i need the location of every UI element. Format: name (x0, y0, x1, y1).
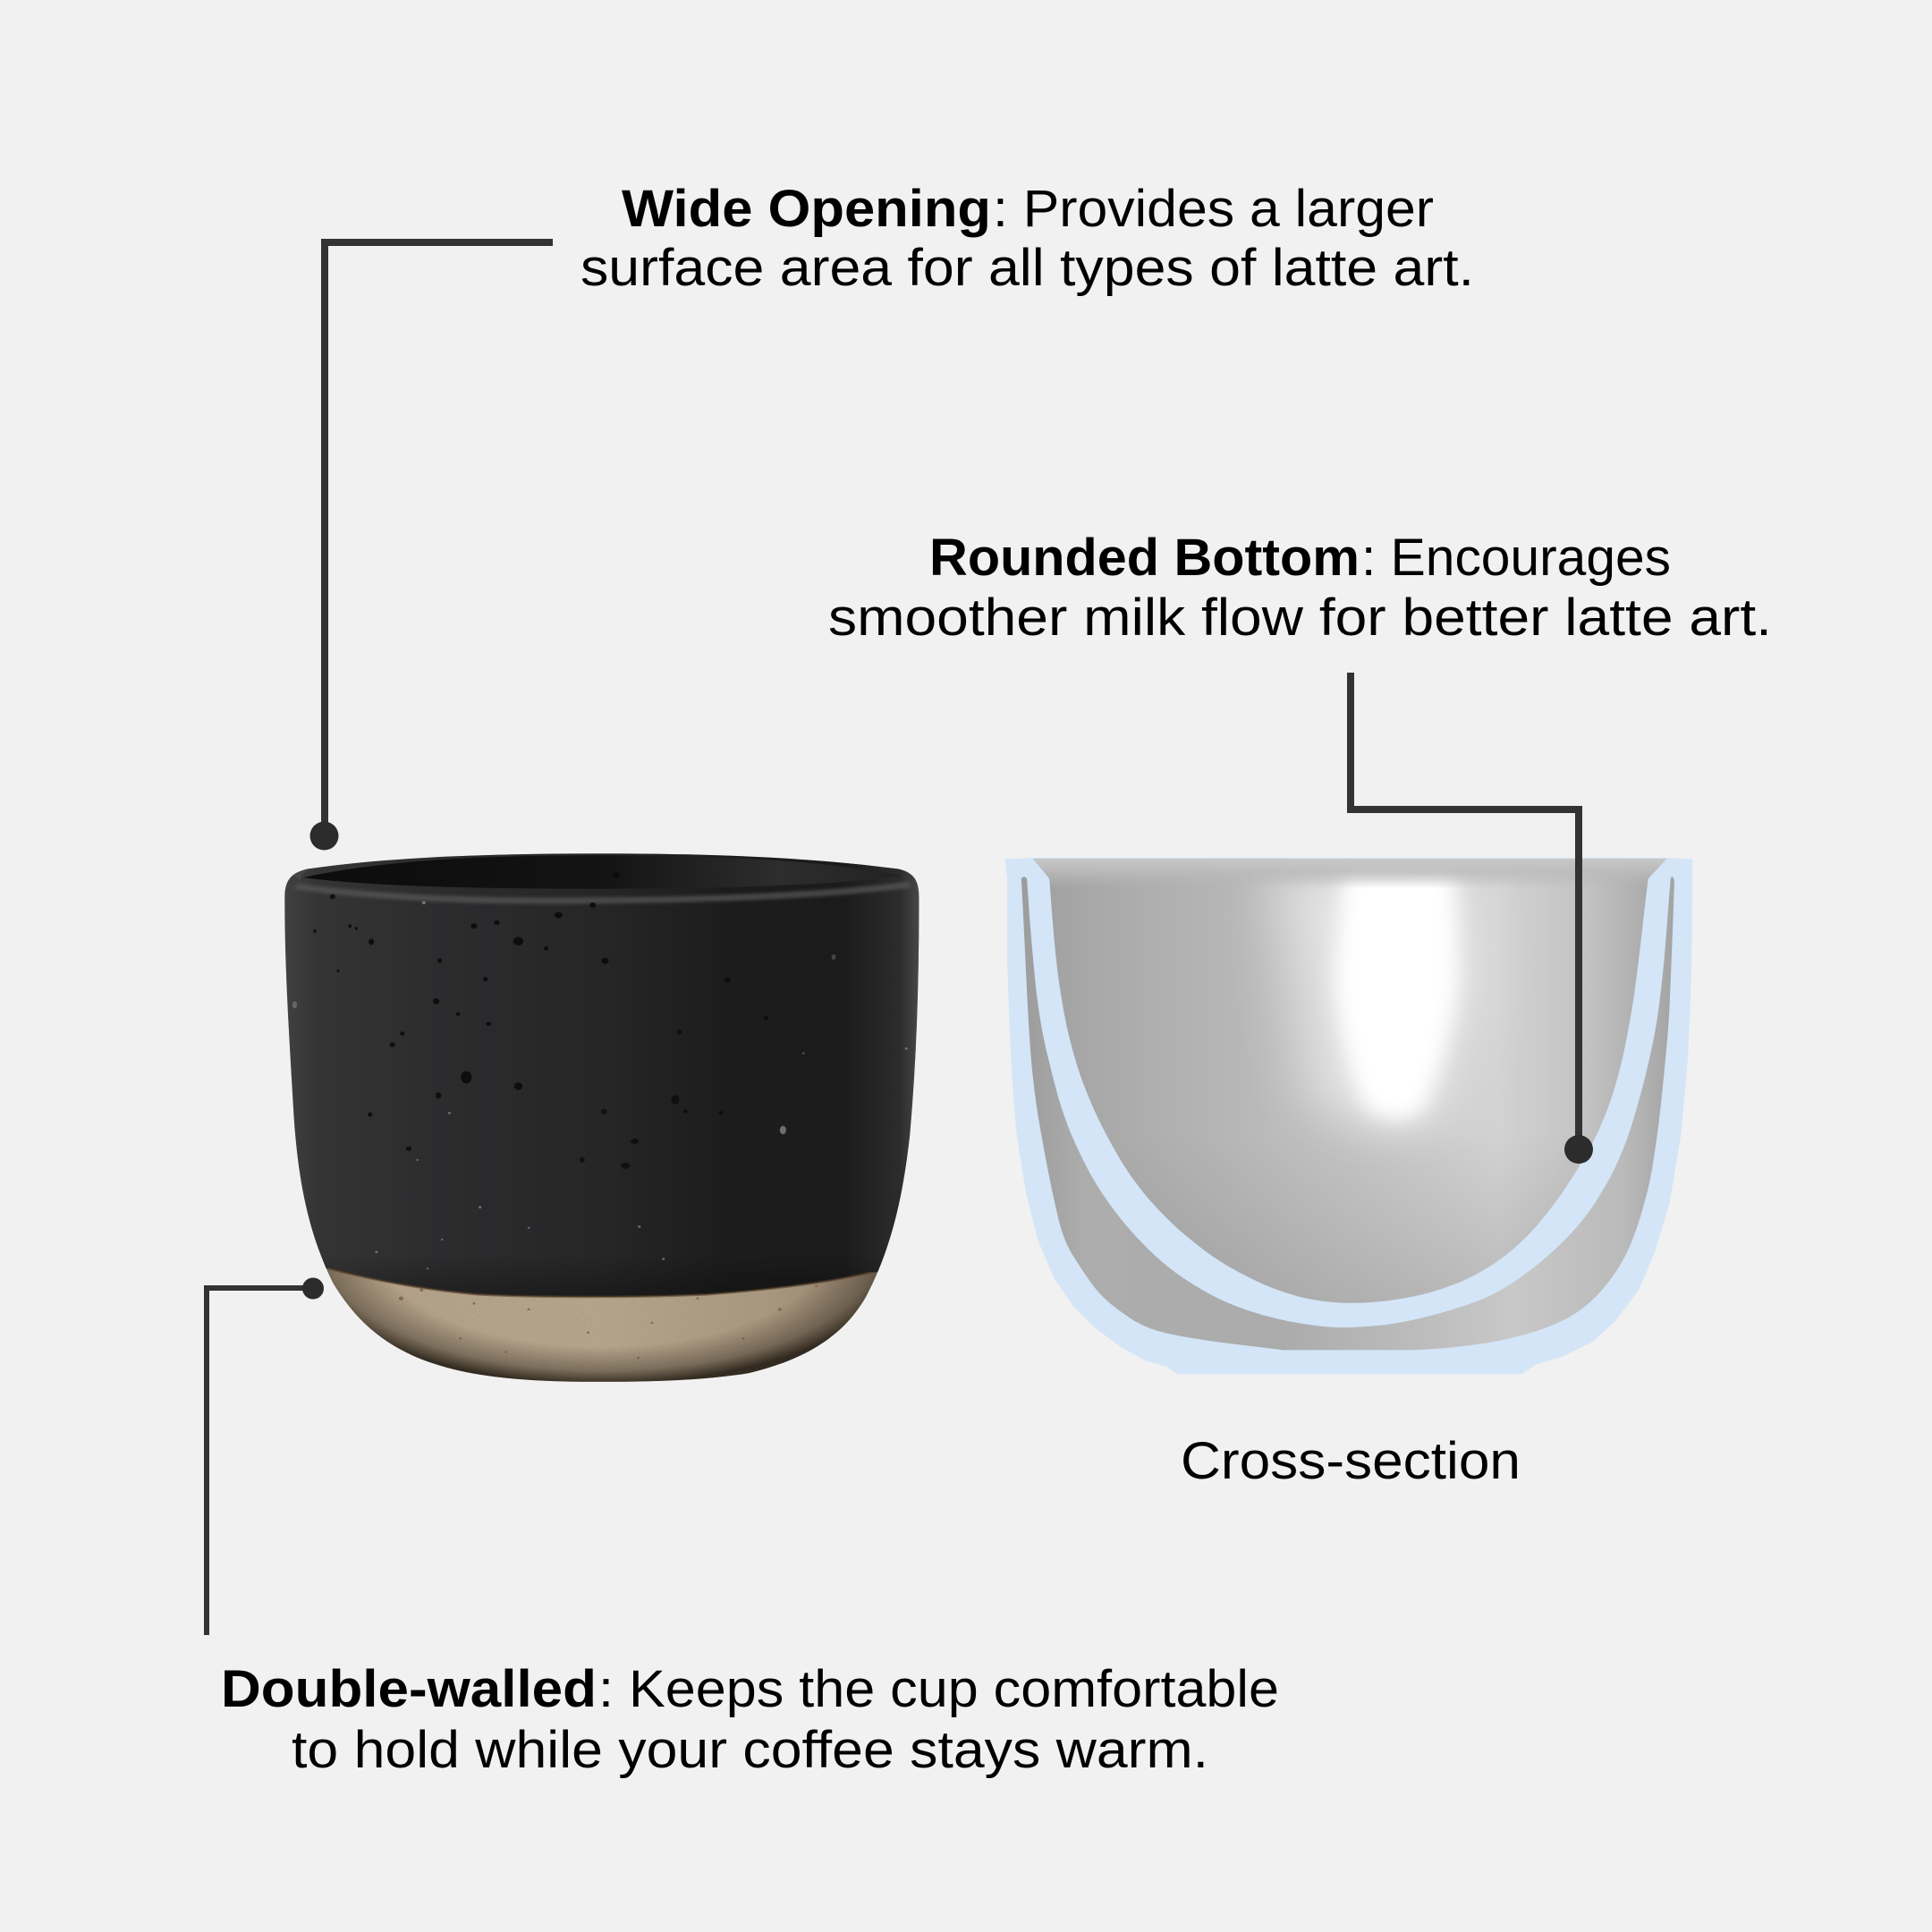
speckles (313, 872, 620, 1151)
leader line: wide opening (309, 242, 553, 850)
air gap between walls (1021, 877, 1674, 1350)
callout: wide opening: surface area for all types of latte art. (580, 239, 1474, 297)
callout: double-walled (221, 1660, 1279, 1779)
bowl lip band (1033, 859, 1666, 886)
callout: wide opening: Wide Opening (622, 180, 991, 238)
callout: rounded bottom: Rounded Bottom (929, 529, 1360, 587)
cross-section of double-walled glass (1005, 855, 1692, 1374)
clay flecks (399, 1284, 818, 1359)
inner bowl (1026, 855, 1672, 1305)
rim highlight (296, 885, 910, 901)
callout: double-walled: Double-walled (221, 1660, 597, 1718)
callout: rounded bottom: : Encourages (1361, 529, 1671, 587)
cup base clay (284, 853, 919, 1382)
callout: wide opening: : Provides a larger (993, 180, 1434, 238)
cup opening (303, 855, 903, 889)
blue wall (1005, 858, 1692, 1374)
callout: wide opening (580, 180, 1474, 297)
cup glazed body (278, 848, 926, 1387)
black speckled cup (278, 848, 926, 1387)
leader line: double-walled (207, 1277, 324, 1635)
callout: rounded bottom (828, 529, 1772, 647)
leader line: rounded bottom (1351, 673, 1593, 1164)
callout: double-walled: to hold while your coffee stays warm. (292, 1721, 1208, 1779)
callout: rounded bottom: smoother milk flow for better latte art. (828, 589, 1772, 647)
callout: double-walled: : Keeps the cup comfortable (598, 1660, 1279, 1718)
caption: cross-section: Cross-section (1181, 1432, 1521, 1490)
bowl highlight (1274, 871, 1475, 1139)
